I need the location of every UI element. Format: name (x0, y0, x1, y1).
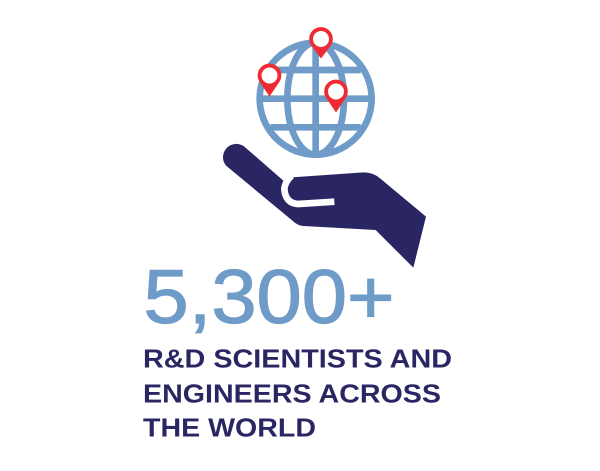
icon: location pin left (258, 64, 281, 97)
icon: location pin top (309, 27, 333, 58)
description text: THE WORLD (143, 412, 316, 442)
description text (143, 344, 452, 442)
description text: ENGINEERS ACROSS (143, 378, 441, 408)
big number: 5,300+ (144, 255, 394, 340)
icon: location pin right (324, 80, 348, 113)
description text: R&D SCIENTISTS AND (143, 344, 452, 374)
icon: globe (259, 42, 372, 155)
icon: open hand (223, 144, 426, 268)
